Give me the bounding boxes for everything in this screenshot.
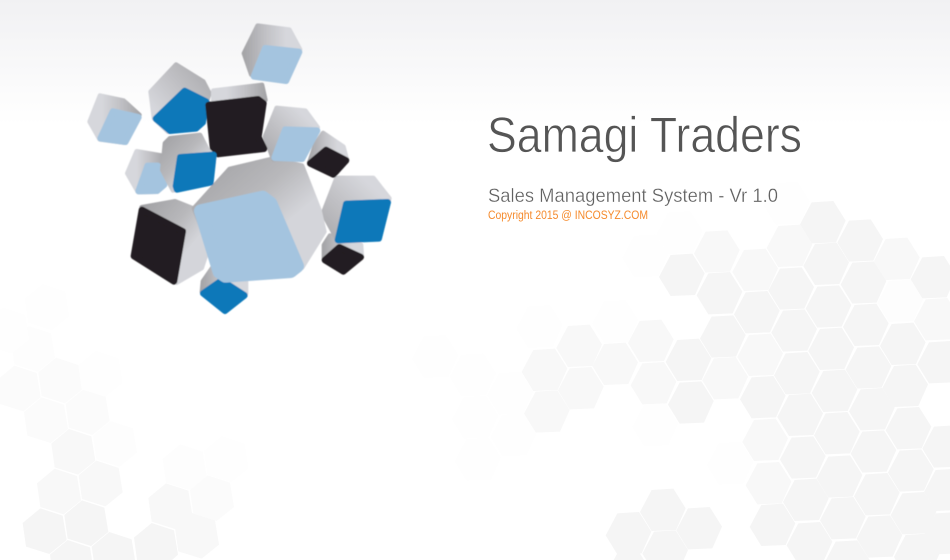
cube: light blue right of black: [265, 108, 318, 159]
cube: top light blue: [244, 26, 300, 81]
cube: blue centre left: [162, 135, 214, 190]
title: Samagi Traders: [487, 107, 802, 163]
cube: black centre: [209, 85, 265, 154]
cube: large black left: [134, 201, 208, 283]
cube: small black lower right: [324, 236, 362, 272]
cube cluster logo: [90, 26, 389, 311]
cube: small blue bottom: [202, 267, 246, 311]
cube: large light blue centre: [194, 159, 324, 276]
cube: small black right: [309, 133, 347, 175]
hexagon pattern: centre: [412, 305, 678, 480]
cube: upper blue: [151, 65, 209, 132]
hexagon pattern: lower left: [0, 284, 248, 560]
copyright line: Copyright 2015 @ INCOSYZ.COM: [488, 210, 648, 222]
hexagon pattern: right side: [592, 182, 950, 560]
cube: right blue: [323, 178, 389, 241]
subtitle: Sales Management System - Vr 1.0: [488, 186, 778, 207]
cube: small light blue left centre: [127, 151, 164, 192]
cube: far left light blue: [90, 96, 139, 143]
